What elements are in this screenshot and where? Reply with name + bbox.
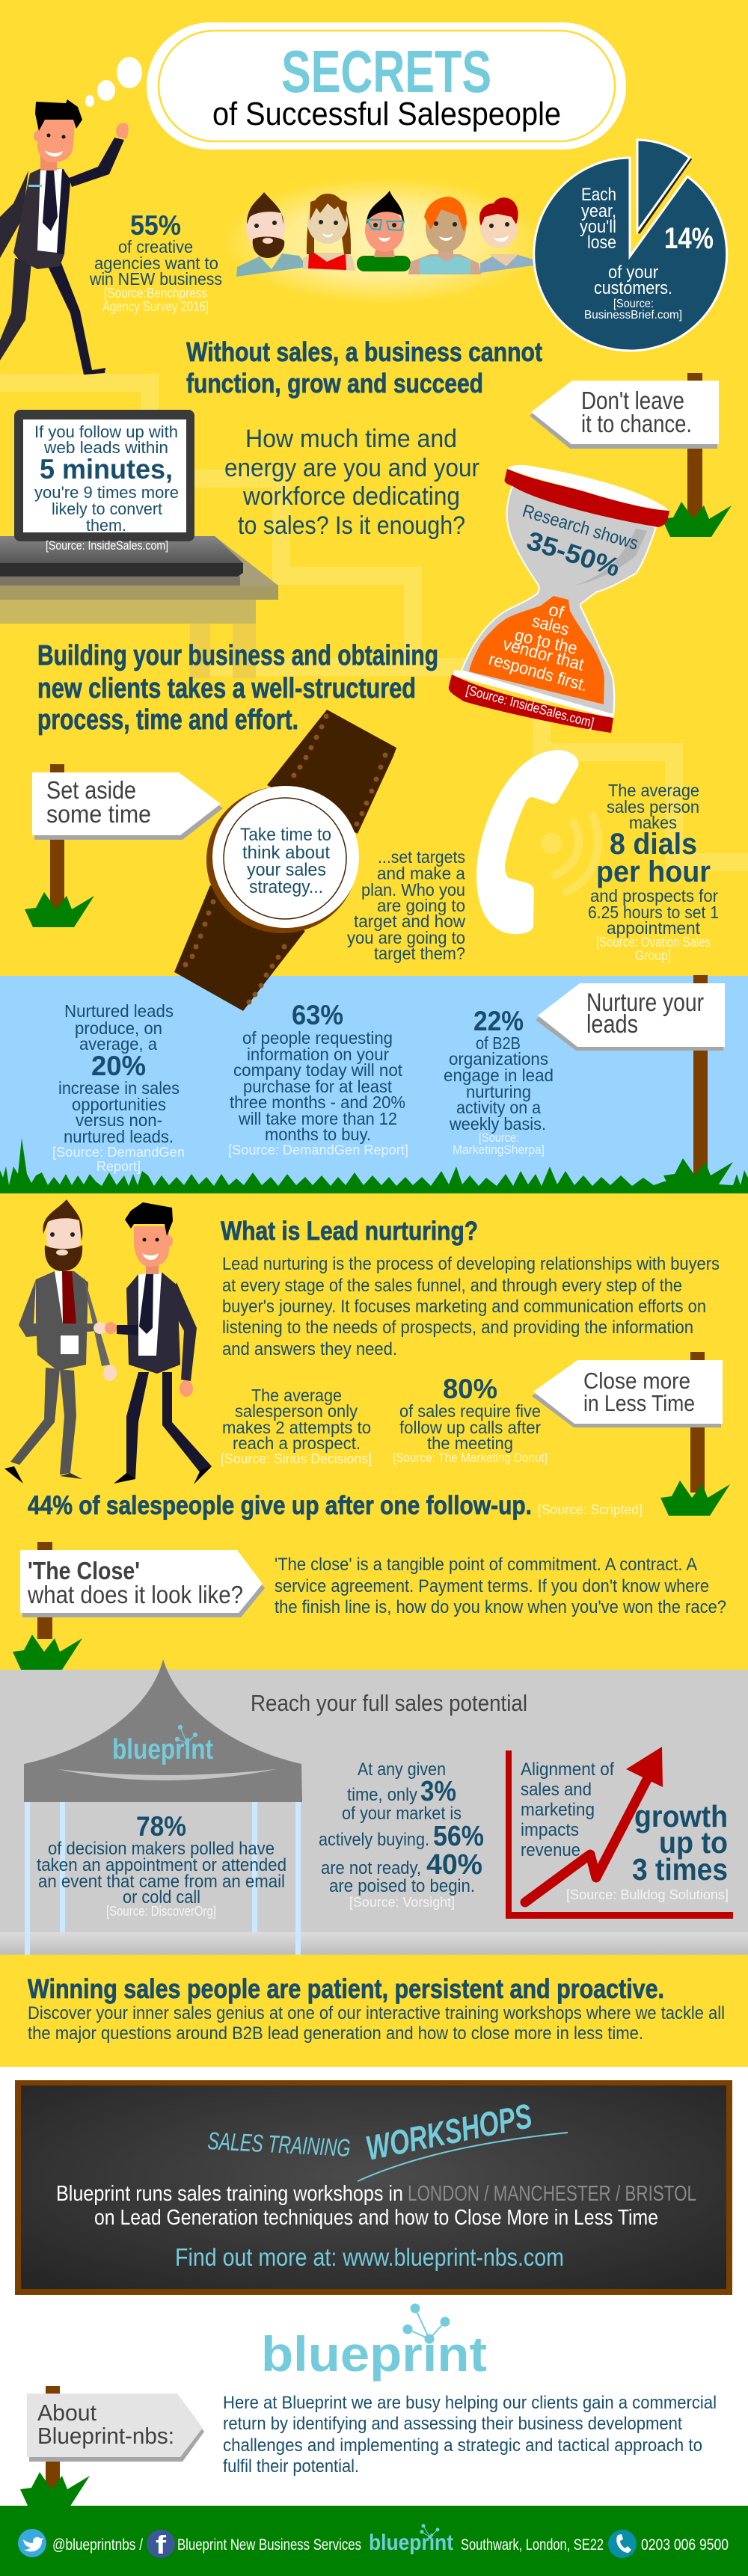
chart text: impacts (521, 1820, 579, 1840)
pie chart: 14% of customers lost (534, 140, 727, 351)
pie text: lose (587, 233, 616, 253)
heading: without sales: Without sales, a business cannot (186, 336, 542, 367)
hourglass text: [Source: InsideSales.com] (465, 683, 595, 731)
pie text: year, (581, 201, 616, 221)
stat: 22% of B2B organizations: MarketingSherpa] (453, 1143, 545, 1157)
stat: 8 dials per hour: sales person (607, 797, 699, 817)
stat: nurtured leads 20%: [Source: DemandGen (52, 1145, 185, 1160)
stat: 55% of creative agencies (89, 210, 222, 314)
stat: 80% of sales require five: 80% (443, 1374, 497, 1404)
chart text: [Source: Bulldog Solutions] (566, 1887, 729, 1902)
stat: nurtured leads 20%: nurtured leads. (64, 1127, 174, 1146)
icon: facebook (147, 2530, 175, 2560)
illustration: wristwatch (174, 710, 396, 1011)
stat: nurtured leads 20%: opportunities (72, 1095, 166, 1114)
stat: 80% of sales require five (393, 1374, 548, 1465)
stat: nurtured leads 20%: versus non- (76, 1110, 162, 1130)
logo: blueprint: blueprint (261, 2326, 487, 2382)
text: how much time and energy (224, 425, 479, 540)
stat: 80% of sales require five: follow up calls after (399, 1418, 541, 1437)
hourglass text: Research shows (520, 501, 640, 554)
watch text: strategy... (249, 877, 323, 897)
stat: 22% of B2B organizations: engage in lead (444, 1066, 554, 1085)
avatar: woman with red hair (479, 197, 533, 273)
stat: 55% of creative agencies: win NEW business (89, 269, 222, 289)
heading: building your business (37, 640, 438, 736)
stat: 78% of decision makers: an event that came from an email (38, 1872, 285, 1892)
hourglass text: sales (530, 611, 571, 639)
stat: 63% of people requesting: purchase for at least (243, 1077, 393, 1096)
chart: revenue growth arrow (506, 1747, 733, 1919)
signpost: don't leave it to chance: Don't leave (581, 387, 684, 414)
text: lead nurturing definition: buyer's journey. It focuses marketing and communication efforts on (222, 1297, 706, 1317)
stat: 22% of B2B organizations (444, 1006, 554, 1157)
pie text: 14% (664, 222, 714, 255)
stat: 22% of B2B organizations: [Source: (479, 1131, 519, 1145)
logo: footer blueprint: blueprint (369, 2530, 453, 2555)
stat: 8 dials per hour: Group] (635, 948, 671, 963)
stat: 8 dials per hour: and prospects for (590, 886, 718, 906)
heading: sales training: SALES TRAINING (207, 2127, 351, 2162)
stat: 8 dials per hour: 8 dials (610, 828, 697, 861)
stat: nurtured leads 20% (52, 1001, 185, 1174)
text: set targets and make a plan: are going to (377, 896, 465, 915)
stat: nurtured leads 20%: increase in sales (58, 1078, 180, 1098)
heading: building your business: process, time and effort. (37, 704, 298, 736)
heading: workshops: WORKSHOPS (363, 2096, 536, 2168)
stat: 63% of people requesting: three months - and 20% (230, 1092, 405, 1112)
stat: 3% 56% 40% of your market: are poised to begin. (329, 1876, 475, 1896)
stat: 22% of B2B organizations: nurturing (466, 1082, 531, 1101)
stat: 78% of decision makers: or cold call (123, 1887, 200, 1908)
text: set targets and make a plan: you are going to (347, 928, 465, 947)
stat: 63% of people requesting: months to buy. (265, 1125, 371, 1144)
heading: without sales: function, grow and succeed (186, 368, 483, 399)
signpost: the close: what does it look like? (27, 1581, 243, 1608)
signpost: don't leave it to chance: it to chance. (581, 410, 692, 437)
heading: reach your full sales potential: Reach your full sales potential (251, 1690, 527, 1716)
stat: 2 attempts to reach a prospect: makes 2 attempts to (222, 1418, 371, 1437)
heading: building your business: new clients takes a well-structured (37, 673, 416, 704)
stat: 55% of creative agencies: of creative (118, 237, 193, 256)
illustration: desk (0, 536, 278, 678)
watch text: Take time to (240, 825, 331, 845)
company name: Blueprint New Business Services (177, 2536, 361, 2554)
text: about blueprint (223, 2393, 717, 2477)
stat: 63% of people requesting: will take more than 12 (238, 1109, 397, 1128)
laptop text (34, 422, 179, 553)
pie text: BusinessBrief.com] (584, 309, 682, 322)
text: set targets and make a plan: target them? (374, 944, 465, 963)
stat: 3% 56% 40% of your market: actively buying. (319, 1830, 429, 1850)
stat: 3% 56% 40% of your market: are not ready, (321, 1858, 421, 1878)
icon: phone (608, 2530, 637, 2558)
laptop text: web leads within (43, 438, 168, 457)
stat: 22% of B2B organizations: of B2B (476, 1033, 521, 1053)
pie text: Each (581, 185, 616, 205)
stat: nurtured leads 20%: average, a (79, 1034, 157, 1054)
stat: 2 attempts to reach a prospect: reach a prospect. (233, 1433, 361, 1453)
text: about blueprint: challenges and implementing a strategic and tactical approach to (223, 2435, 702, 2456)
stat: 2 attempts to reach a prospect: salesperson only (235, 1401, 358, 1421)
stat: 55% of creative agencies: 55% (130, 210, 181, 241)
stat: 3% 56% 40% of your market: [Source: Vorsight] (349, 1895, 455, 1910)
text: set targets and make a plan: ...set targets (378, 847, 465, 867)
stat: 8 dials per hour: per hour (596, 855, 711, 888)
section: winning sales people (28, 1973, 725, 2044)
text: workshop details: Find out more at: www.blueprint-nbs.com (175, 2243, 564, 2271)
text: workshop details: on Lead Generation techniques and how to Close More in Less Time (94, 2206, 658, 2230)
stat: 63% of people requesting: of people requesting (242, 1028, 393, 1048)
title pill (147, 22, 626, 150)
text: workshop details (56, 2182, 696, 2271)
stat: 55% of creative agencies: agencies want to (94, 253, 218, 273)
hourglass text: of (547, 600, 566, 622)
text: how much time and energy: How much time and (245, 425, 457, 453)
stat: 8 dials per hour: 6.25 hours to set 1 (588, 903, 719, 922)
chart text: revenue (521, 1840, 580, 1860)
stat: 80% of sales require five: of sales require five (399, 1401, 541, 1421)
illustration: blueprint tent (24, 1659, 302, 1955)
text: lead nurturing definition (222, 1254, 720, 1359)
pie text: of your (608, 262, 658, 283)
text: the close definition: service agreement. Payment terms. If you don't know where (275, 1576, 709, 1596)
hourglass text: 35-50% (524, 526, 623, 582)
signpost: nurture your leads: Nurture your (586, 989, 704, 1017)
handle: @blueprintnbs / (52, 2536, 143, 2554)
illustration: five avatars (222, 177, 544, 304)
pie text: [Source: (613, 298, 654, 310)
logo: blueprint (261, 2305, 487, 2382)
stat: 55% of creative agencies: Agency Survey 2016] (102, 299, 209, 314)
stat: 78% of decision makers: 78% (136, 1811, 186, 1842)
signpost: close more in less time: Close more (583, 1368, 690, 1394)
stat: 3% 56% 40% of your market (319, 1759, 484, 1910)
stat: 22% of B2B organizations: weekly basis. (449, 1114, 546, 1134)
text: how much time and energy: workforce dedicating (242, 482, 460, 511)
stat: 3% 56% 40% of your market: 3% (420, 1776, 456, 1807)
pie text: you'll (580, 217, 616, 237)
text: set targets and make a plan: and make a (377, 864, 465, 883)
stat: 22% of B2B organizations: organizations (449, 1049, 548, 1069)
text: set targets and make a plan: plan. Who you (361, 880, 465, 900)
heading: 44% of salespeople give up: 44% of salespeople give up after one follow-up. (28, 1491, 532, 1520)
section: winning sales people: the major questions around B2B lead generation and how to close more in less time. (28, 2023, 643, 2044)
text: workshop details: Blueprint runs sales training workshops in (56, 2182, 403, 2206)
stat: 8 dials per hour (588, 781, 719, 963)
illustration: two men shaking hands (4, 1199, 212, 1484)
panel: chalkboard workshops (15, 2080, 732, 2295)
stat: 55% of creative agencies: [Source:Benchpress (104, 286, 207, 301)
stat: 63% of people requesting: company today will not (233, 1060, 403, 1080)
title: SECRETS: SECRETS (281, 38, 491, 105)
hourglass text (465, 501, 640, 731)
illustration: hourglass (449, 465, 669, 733)
icon: telephone handset (476, 750, 598, 934)
stat: 8 dials per hour: appointment (607, 918, 701, 938)
tent logo: blueprint (112, 1734, 213, 1765)
phone number: 0203 006 9500 (641, 2536, 729, 2554)
text: the close definition: 'The close' is a tangible point of commitment. A contract. A (275, 1555, 697, 1575)
illustration: salesman waving (0, 99, 129, 375)
illustration: laptop (0, 410, 243, 585)
address: Southwark, London, SE22 (461, 2536, 604, 2554)
stat: 63% of people requesting: 63% (292, 1000, 343, 1030)
signpost: close more in less time: in Less Time (583, 1390, 695, 1416)
chart text: up to (659, 1825, 728, 1860)
signpost: nurture your leads (536, 975, 733, 1193)
text: lead nurturing definition: and answers they need. (222, 1339, 397, 1359)
footer (0, 2506, 748, 2576)
avatar: woman with orange hair (408, 197, 481, 274)
text: set targets and make a plan (347, 847, 465, 963)
signpost: set aside some time: Set aside (46, 776, 136, 804)
signpost: about blueprint-nbs: Blueprint-nbs: (37, 2423, 174, 2449)
signpost: set aside some time: some time (46, 800, 151, 828)
laptop text: you're 9 times more (34, 483, 179, 502)
text: the close definition (275, 1555, 726, 1617)
stat: 2 attempts to reach a prospect (221, 1386, 372, 1466)
signpost: don't leave it to chance (530, 373, 732, 537)
text: lead nurturing definition: at every stage of the sales funnel, and through every step of the (222, 1276, 682, 1296)
grass strip (0, 1138, 748, 1193)
stat: 3% 56% 40% of your market: 40% (426, 1849, 482, 1881)
laptop text: 5 minutes, (40, 454, 173, 485)
signpost: nurture your leads: leads (586, 1010, 638, 1039)
text: about blueprint: Here at Blueprint we are busy helping our clients gain a commercial (223, 2393, 717, 2413)
stat: 8 dials per hour: [Source: Ovation Sales (596, 935, 711, 950)
avatar: man with glasses (357, 191, 411, 271)
stat: 3% 56% 40% of your market: of your market is (342, 1804, 462, 1824)
text: how much time and energy: to sales? Is it enough? (238, 511, 465, 540)
hourglass text: go to the (513, 625, 580, 658)
hourglass text: vendor that (501, 634, 586, 674)
chart text: marketing (521, 1800, 595, 1820)
avatar: bearded man (236, 192, 307, 277)
heading: what is lead nurturing: What is Lead nurturing? (221, 1217, 478, 1246)
stat: nurtured leads 20%: Nurtured leads (64, 1001, 174, 1021)
signpost: the close (13, 1542, 265, 1670)
pie text: customers. (594, 278, 672, 298)
signpost: about blueprint-nbs: About (37, 2400, 96, 2426)
chart text (521, 1759, 729, 1902)
heading: 44% of salespeople give up: [Source: Scripted] (538, 1502, 643, 1517)
bearded man (4, 1199, 117, 1484)
stat: 63% of people requesting: information on your (247, 1045, 389, 1064)
icon: thought bubbles (85, 57, 142, 107)
stat: 63% of people requesting: [Source: DemandGen Report] (228, 1143, 408, 1158)
icon: twitter (18, 2529, 46, 2557)
text: about blueprint: fulfil their potential. (223, 2456, 359, 2477)
stat: 78% of decision makers: [Source: DiscoverOrg] (106, 1904, 216, 1919)
stat: 3% 56% 40% of your market: At any given (358, 1759, 446, 1780)
chart text: Alignment of (521, 1759, 614, 1780)
laptop text: them. (86, 516, 126, 535)
text: set targets and make a plan: target and how (354, 912, 465, 931)
avatar: woman with brown hair (303, 194, 356, 271)
blueprint man (105, 1202, 212, 1484)
stat: nurtured leads 20%: 20% (91, 1051, 146, 1081)
laptop text: [Source: InsideSales.com] (46, 538, 168, 553)
pie text (580, 185, 714, 322)
stat: 3% 56% 40% of your market: time, only (347, 1785, 417, 1805)
hourglass text: responds first. (487, 649, 590, 695)
stat: 3% 56% 40% of your market: 56% (433, 1821, 484, 1852)
stat: nurtured leads 20%: produce, on (75, 1018, 162, 1038)
text: how much time and energy: energy are you and your (224, 454, 479, 482)
signpost: about blueprint-nbs (20, 2386, 204, 2507)
chart text: sales and (521, 1780, 592, 1800)
stat: 78% of decision makers: taken an appointment or attended (37, 1855, 286, 1875)
stat: 80% of sales require five: [Source: The Marketing Donut] (393, 1451, 548, 1465)
stat: 78% of decision makers (37, 1811, 286, 1919)
heading: without sales (186, 336, 542, 399)
subtitle: of Successful Salespeople (212, 96, 561, 132)
watch text: your sales (247, 860, 326, 880)
heading: building your business: Building your business and obtaining (37, 640, 438, 671)
signpost: set aside some time (25, 764, 223, 927)
text: about blueprint: return by identifying and assessing their business development (223, 2414, 682, 2434)
stat: 2 attempts to reach a prospect: [Source: Sirius Decisions] (221, 1451, 372, 1466)
tent logo (112, 1726, 213, 1765)
stat: 8 dials per hour: The average (608, 781, 699, 800)
signpost: close more in less time (532, 1352, 730, 1516)
chart text: growth (634, 1799, 728, 1833)
stat: 63% of people requesting (228, 1000, 408, 1158)
watch text (240, 825, 331, 897)
stat: 78% of decision makers: of decision makers polled have (48, 1839, 275, 1859)
signpost: the close: 'The Close' (28, 1557, 140, 1584)
icon: facebook: f (156, 2531, 167, 2560)
stat: 80% of sales require five: the meeting (427, 1433, 513, 1453)
stat: nurtured leads 20%: Report] (96, 1159, 141, 1174)
laptop text: likely to convert (52, 499, 162, 518)
watch text: think about (242, 843, 330, 863)
stat: 8 dials per hour: makes (629, 813, 677, 832)
chart text: 3 times (632, 1852, 728, 1887)
laptop text: If you follow up with (34, 422, 178, 441)
stat: 22% of B2B organizations: activity on a (456, 1098, 541, 1117)
text: lead nurturing definition: listening to the needs of prospects, and providing the information (222, 1318, 693, 1338)
stat: 22% of B2B organizations: 22% (473, 1006, 524, 1036)
stat: 2 attempts to reach a prospect: The average (251, 1386, 342, 1405)
